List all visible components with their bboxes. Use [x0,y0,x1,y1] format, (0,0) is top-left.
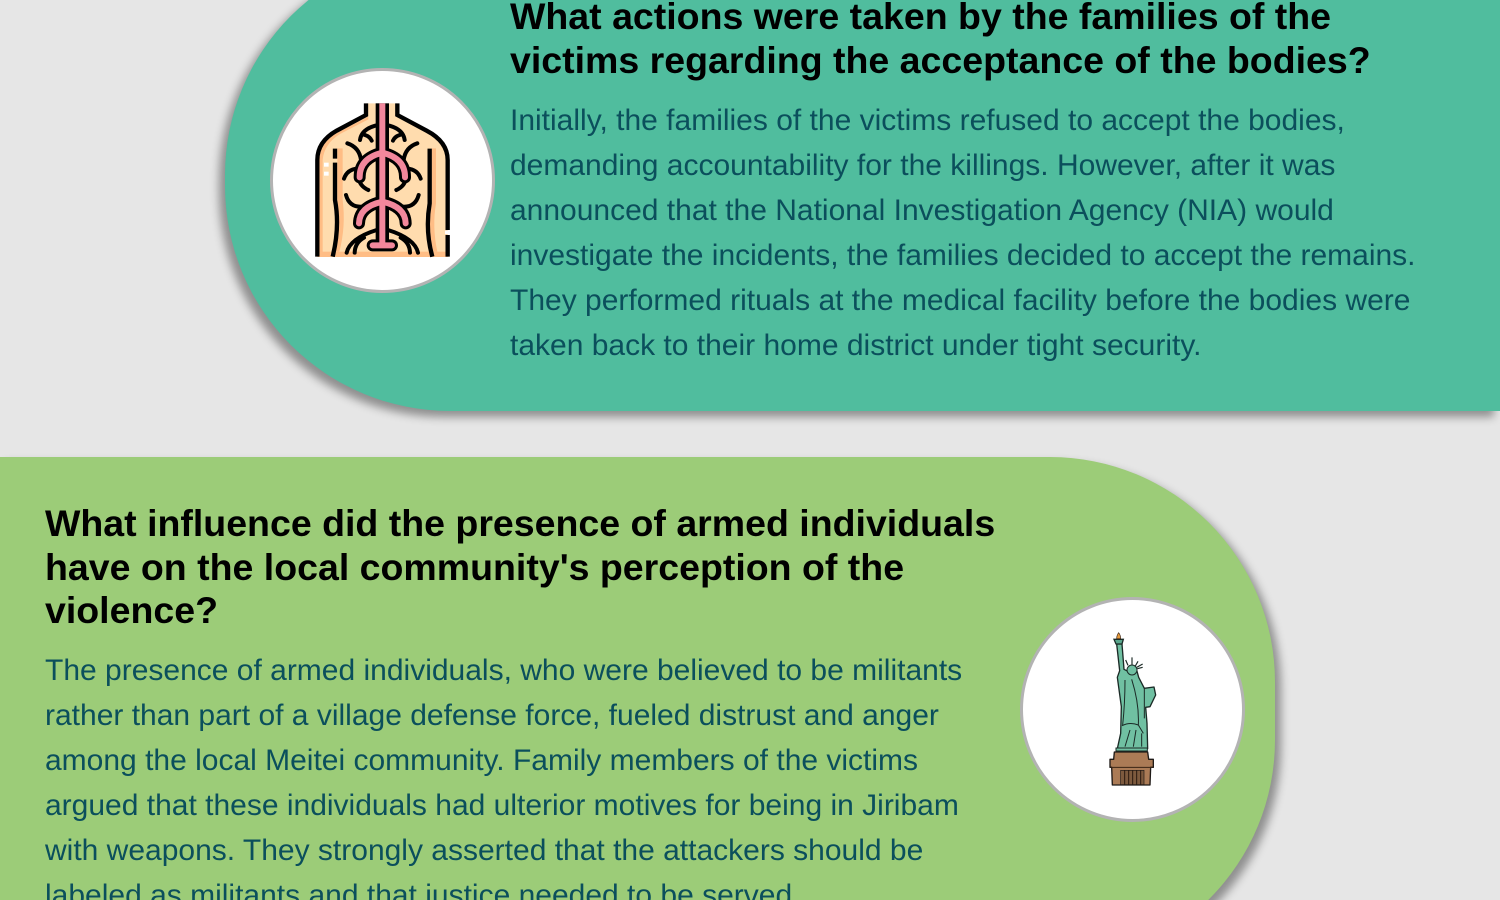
text block: families' actions [510,104,1416,362]
text block: families' actions: announced that the National Investigation Agency (NIA) would [510,194,1334,227]
text block: families' actions: Initially, the families of the victims refused to accept the bodies, [510,104,1345,137]
icon: statue of liberty [1109,632,1156,786]
text block: families' actions: They performed rituals at the medical facility before the bodies were [510,284,1410,317]
text block: armed individuals: The presence of armed individuals, who were believed to be militants [45,654,962,687]
panel: armed individuals [0,457,1275,900]
icon circle: body with veins [270,68,495,293]
heading: armed individuals: violence? [45,589,218,631]
heading: armed individuals [45,502,995,631]
text block: armed individuals: with weapons. They strongly asserted that the attackers should be [45,834,923,867]
text block: families' actions: investigate the incidents, the families decided to accept the remains. [510,239,1416,272]
text block: armed individuals: rather than part of a village defense force, fueled distrust and anger [45,699,939,732]
heading: families' actions [510,0,1371,80]
heading: armed individuals: What influence did the presence of armed individuals [45,502,995,544]
text block: armed individuals: among the local Meitei community. Family members of the victims [45,744,918,777]
text block: families' actions: demanding accountability for the killings. However, after it was [510,149,1335,182]
text block: armed individuals: argued that these individuals had ulterior motives for being in Jiribam [45,789,959,822]
icon circle: statue of liberty [1020,597,1245,822]
panel: families' actions [225,0,1500,411]
text block: families' actions: taken back to their home district under tight security. [510,329,1201,362]
text block: armed individuals [45,654,962,900]
heading: armed individuals: have on the local community's perception of the [45,546,904,588]
heading: families' actions: victims regarding the acceptance of the bodies? [510,38,1371,80]
icon: body with veins [315,103,450,258]
